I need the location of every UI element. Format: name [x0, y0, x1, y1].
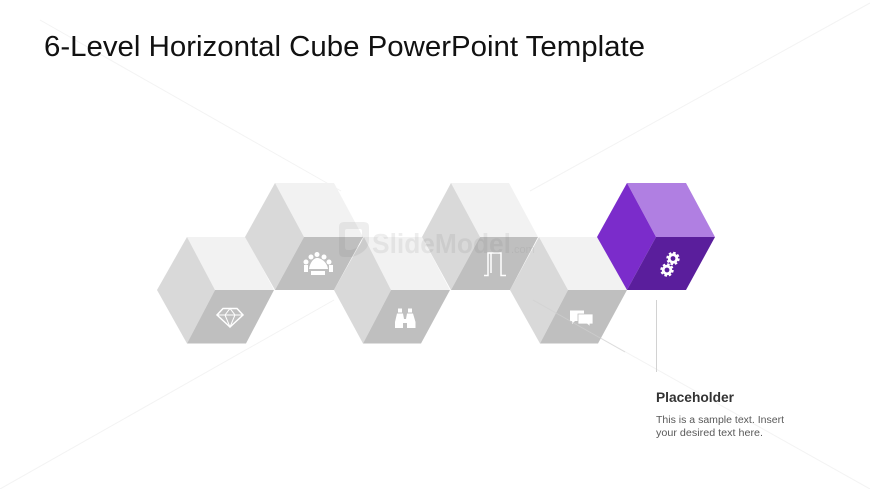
cube 1: diamond: [157, 237, 274, 344]
icon: binoculars: [395, 308, 416, 328]
cube 3: binoculars: [334, 237, 450, 344]
cube 2: team circle: [245, 183, 363, 290]
callout body: This is a sample text. Insert: [656, 415, 784, 426]
icon: gears: [661, 253, 679, 276]
callout: placeholder text: [656, 390, 784, 439]
watermark: [339, 222, 535, 259]
callout body: [656, 415, 784, 439]
callout heading: Placeholder: [656, 390, 735, 405]
cube 6: gears, highlighted: [597, 183, 715, 290]
cube 4: door: [422, 183, 538, 290]
icon: chat bubbles: [570, 310, 593, 326]
watermark: SlideModel: [372, 228, 511, 259]
watermark: .com: [511, 244, 535, 256]
icon: team circle: [304, 252, 333, 275]
cube 5: chat bubbles: [510, 237, 627, 344]
icon: diamond: [217, 308, 243, 327]
callout body: your desired text here.: [656, 428, 763, 439]
cube row: [157, 183, 715, 344]
title: 6-Level Horizontal Cube PowerPoint Template: [44, 31, 645, 63]
leader line: [656, 300, 658, 372]
icon: door: [484, 253, 506, 276]
